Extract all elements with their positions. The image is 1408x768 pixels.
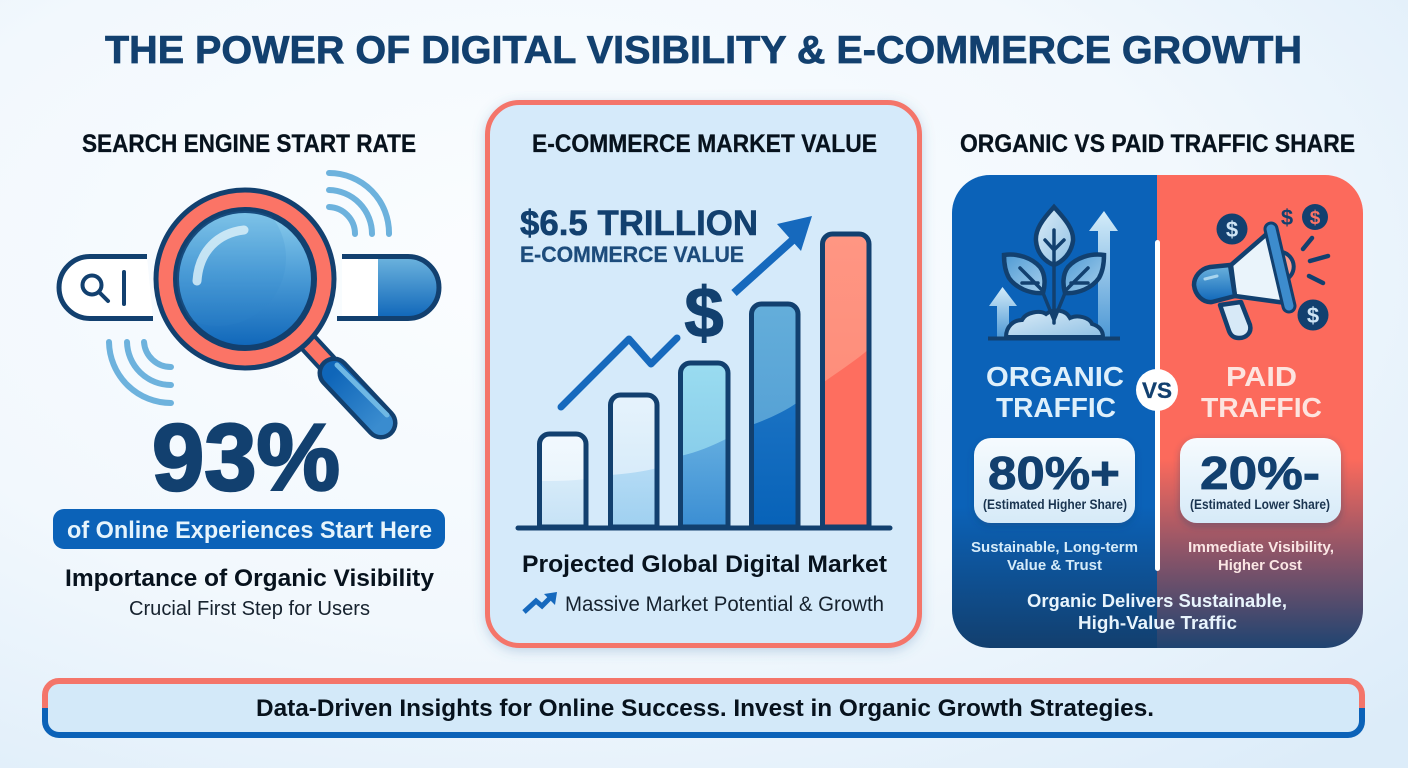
pill: of online experiences start here: [53, 509, 445, 549]
icon: dollar coins: $: [1226, 217, 1238, 242]
icon: dollar coins: [1216, 204, 1328, 330]
pill: of online experiences start here: of Online Experiences Start Here: [67, 517, 432, 544]
stat card: organic 80 percent: [974, 438, 1135, 523]
bar chart: [518, 234, 890, 528]
split background: [952, 175, 1363, 648]
bar 3: [680, 363, 728, 527]
heading: search engine start rate: SEARCH ENGINE START RATE: [82, 130, 416, 158]
text: organic benefits: [971, 539, 1138, 574]
text: organic benefits: Value & Trust: [1007, 557, 1102, 574]
icon: dollar sign: $: [684, 274, 724, 353]
text: massive market potential: Massive Market Potential & Growth: [565, 593, 884, 616]
stat card: paid 20 percent: 20%-: [1200, 447, 1320, 499]
text: organic benefits: Sustainable, Long-term: [971, 539, 1138, 556]
stat: 6.5 trillion: $6.5 TRILLION: [520, 204, 758, 243]
stat card: paid 20 percent: [1180, 438, 1341, 523]
footer banner: [45, 681, 1362, 735]
label: organic traffic: TRAFFIC: [996, 392, 1116, 423]
label: organic traffic: [986, 361, 1124, 423]
text: paid benefits: Immediate Visibility,: [1188, 539, 1334, 556]
bar 1: [540, 434, 586, 527]
bar 4: [752, 304, 798, 527]
text: organic delivers conclusion: [1027, 591, 1287, 633]
label: paid traffic: TRAFFIC: [1201, 392, 1322, 423]
icon: megaphone: [1194, 229, 1328, 338]
stat card: paid 20 percent: (Estimated Lower Share): [1190, 496, 1330, 512]
text: importance of organic visibility: Importance of Organic Visibility: [65, 565, 435, 592]
divider and vs badge: VS: [1142, 378, 1172, 403]
heading: e-commerce market value: E-COMMERCE MARKET VALUE: [532, 130, 877, 158]
title: THE POWER OF DIGITAL VISIBILITY & E-COMMERCE GROWTH: [105, 29, 1302, 72]
label: paid traffic: PAID: [1226, 361, 1297, 392]
icon: growing plant: [988, 207, 1120, 338]
stat card: organic 80 percent: (Estimated Higher Share): [983, 496, 1127, 512]
bar 2: [610, 395, 657, 527]
bar 5: [822, 234, 869, 527]
icon: magnifying glass: [150, 190, 387, 423]
panel: organic vs paid traffic share: [952, 130, 1363, 648]
icon: dollar coins: $: [1307, 303, 1319, 328]
text: paid benefits: Higher Cost: [1218, 557, 1302, 574]
icon: small growth arrow: [524, 592, 557, 612]
text: organic delivers conclusion: High-Value Traffic: [1078, 613, 1237, 633]
text: projected global digital market: Projected Global Digital Market: [522, 551, 887, 578]
label: e-commerce value: E-COMMERCE VALUE: [520, 242, 744, 267]
panel: search engine start rate: [53, 130, 445, 620]
panel: e-commerce market value: [488, 102, 920, 646]
label: organic traffic: ORGANIC: [986, 361, 1124, 392]
icon: search bar: [59, 256, 439, 318]
arrow: growth trend line: [561, 216, 812, 407]
text: paid benefits: [1188, 539, 1334, 574]
stat: 93 percent: 93%: [152, 405, 340, 511]
card background: [488, 102, 920, 646]
text: crucial first step: Crucial First Step for Users: [129, 598, 370, 620]
stat card: organic 80 percent: 80%+: [988, 447, 1120, 499]
icon: dollar coins: $: [1281, 205, 1293, 230]
footer banner: Data-Driven Insights for Online Success. Invest in Organic Growth Strategies.: [256, 695, 1154, 722]
text: organic delivers conclusion: Organic Delivers Sustainable,: [1027, 591, 1287, 611]
label: paid traffic: [1201, 361, 1322, 423]
heading: organic vs paid traffic share: ORGANIC VS PAID TRAFFIC SHARE: [960, 130, 1355, 158]
divider and vs badge: [1136, 242, 1178, 568]
icon: dollar coins: $: [1310, 208, 1321, 229]
icon: signal arcs top right: [329, 173, 389, 234]
icon: signal arcs bottom left: [109, 342, 171, 403]
